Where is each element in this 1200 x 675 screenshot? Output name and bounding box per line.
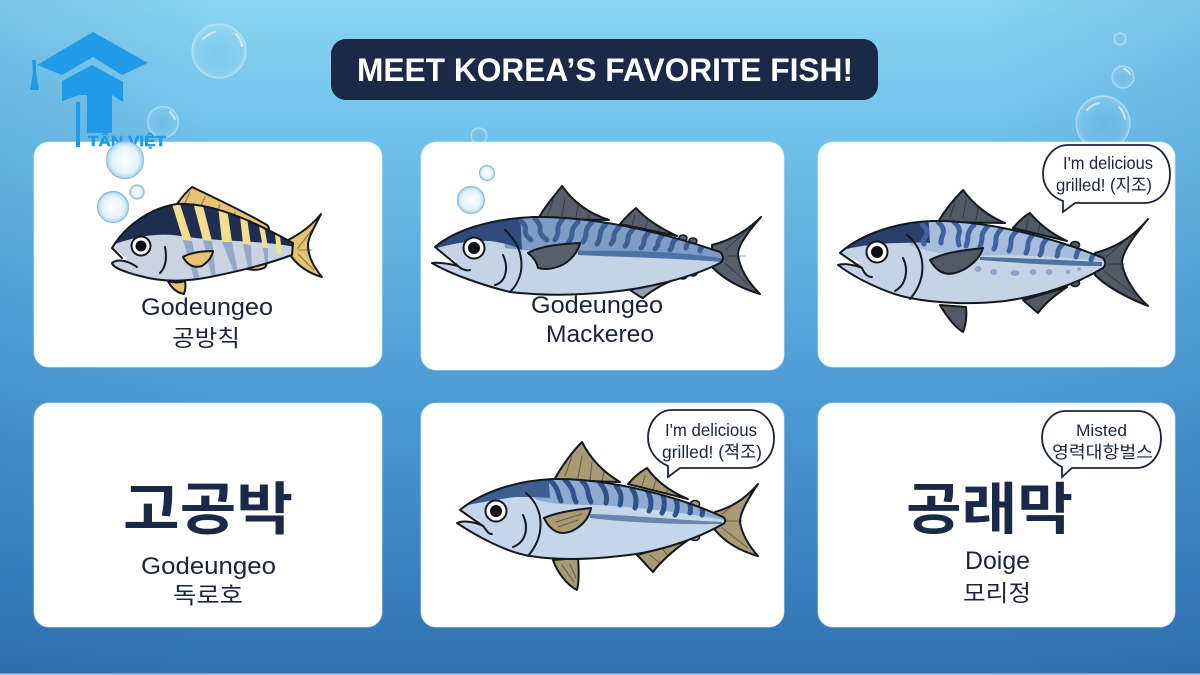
- speech bubble: card 6: [1042, 411, 1161, 477]
- label: card 6 name: [963, 547, 1031, 606]
- label: card 6 name: Doige: [965, 547, 1030, 575]
- label: card 6 name: 모리정: [963, 580, 1031, 606]
- label: card 4 name: 독로호: [173, 582, 243, 608]
- illustration: yellow striped fish: [105, 187, 322, 294]
- title banner: MEET KOREA’S FAVORITE FISH!: [357, 52, 853, 88]
- speech bubble: card 3: I'm delicious: [1063, 153, 1153, 173]
- label: card 2 name: [531, 292, 663, 348]
- panel: card 5 tan-finned mackerel: [421, 403, 784, 627]
- panel: card 3 grilled mackerel: [818, 142, 1175, 367]
- panel: card 6 Korean name with bubble: [818, 403, 1175, 627]
- label: card 4 name: [141, 553, 276, 608]
- label: card 1 name: Godeungeo: [141, 294, 273, 321]
- title banner: [331, 39, 878, 100]
- heading: card 4 Korean name: 고공박: [123, 478, 293, 542]
- speech bubble: card 3: [1043, 145, 1170, 212]
- speech bubble: card 5: grilled! (젹조): [662, 442, 762, 462]
- icon: bubble overlapping card 1: [106, 142, 144, 178]
- icon: bubbles near fish 1: [98, 185, 144, 222]
- label: card 2 name: Godeungeo: [531, 292, 663, 319]
- label: card 1 name: 공방칙: [172, 325, 240, 351]
- panel: card 2 mackerel: [421, 142, 784, 370]
- illustration: mackerel with grey fins: [430, 186, 761, 298]
- illustration: mackerel with spots: [835, 190, 1148, 332]
- label: card 2 name: Mackereo: [546, 321, 654, 348]
- speech bubble: card 6: 영력대항벌스: [1052, 443, 1153, 462]
- speech bubble: card 5: I'm delicious: [665, 420, 757, 440]
- icon: logo Tân Việt: [30, 32, 166, 150]
- label: card 1 name: [141, 294, 273, 351]
- panel: card 4 Korean name only: [34, 403, 382, 627]
- label: card 4 name: Godeungeo: [141, 553, 276, 580]
- icon: bubbles near fish 2: [458, 166, 494, 214]
- panel: card 1 striped yellow-fin fish: [34, 142, 382, 367]
- icon: logo Tân Việt: TÂN VIỆT: [88, 132, 166, 150]
- illustration: mackerel with tan fins: [455, 442, 758, 590]
- heading: card 6 Korean name: 공래막: [906, 478, 1073, 541]
- speech bubble: card 3: grilled! (지조): [1056, 175, 1152, 195]
- speech bubble: card 6: Misted: [1076, 421, 1127, 440]
- speech bubble: card 5: [648, 410, 774, 477]
- bubbles behind cards: [148, 24, 1134, 150]
